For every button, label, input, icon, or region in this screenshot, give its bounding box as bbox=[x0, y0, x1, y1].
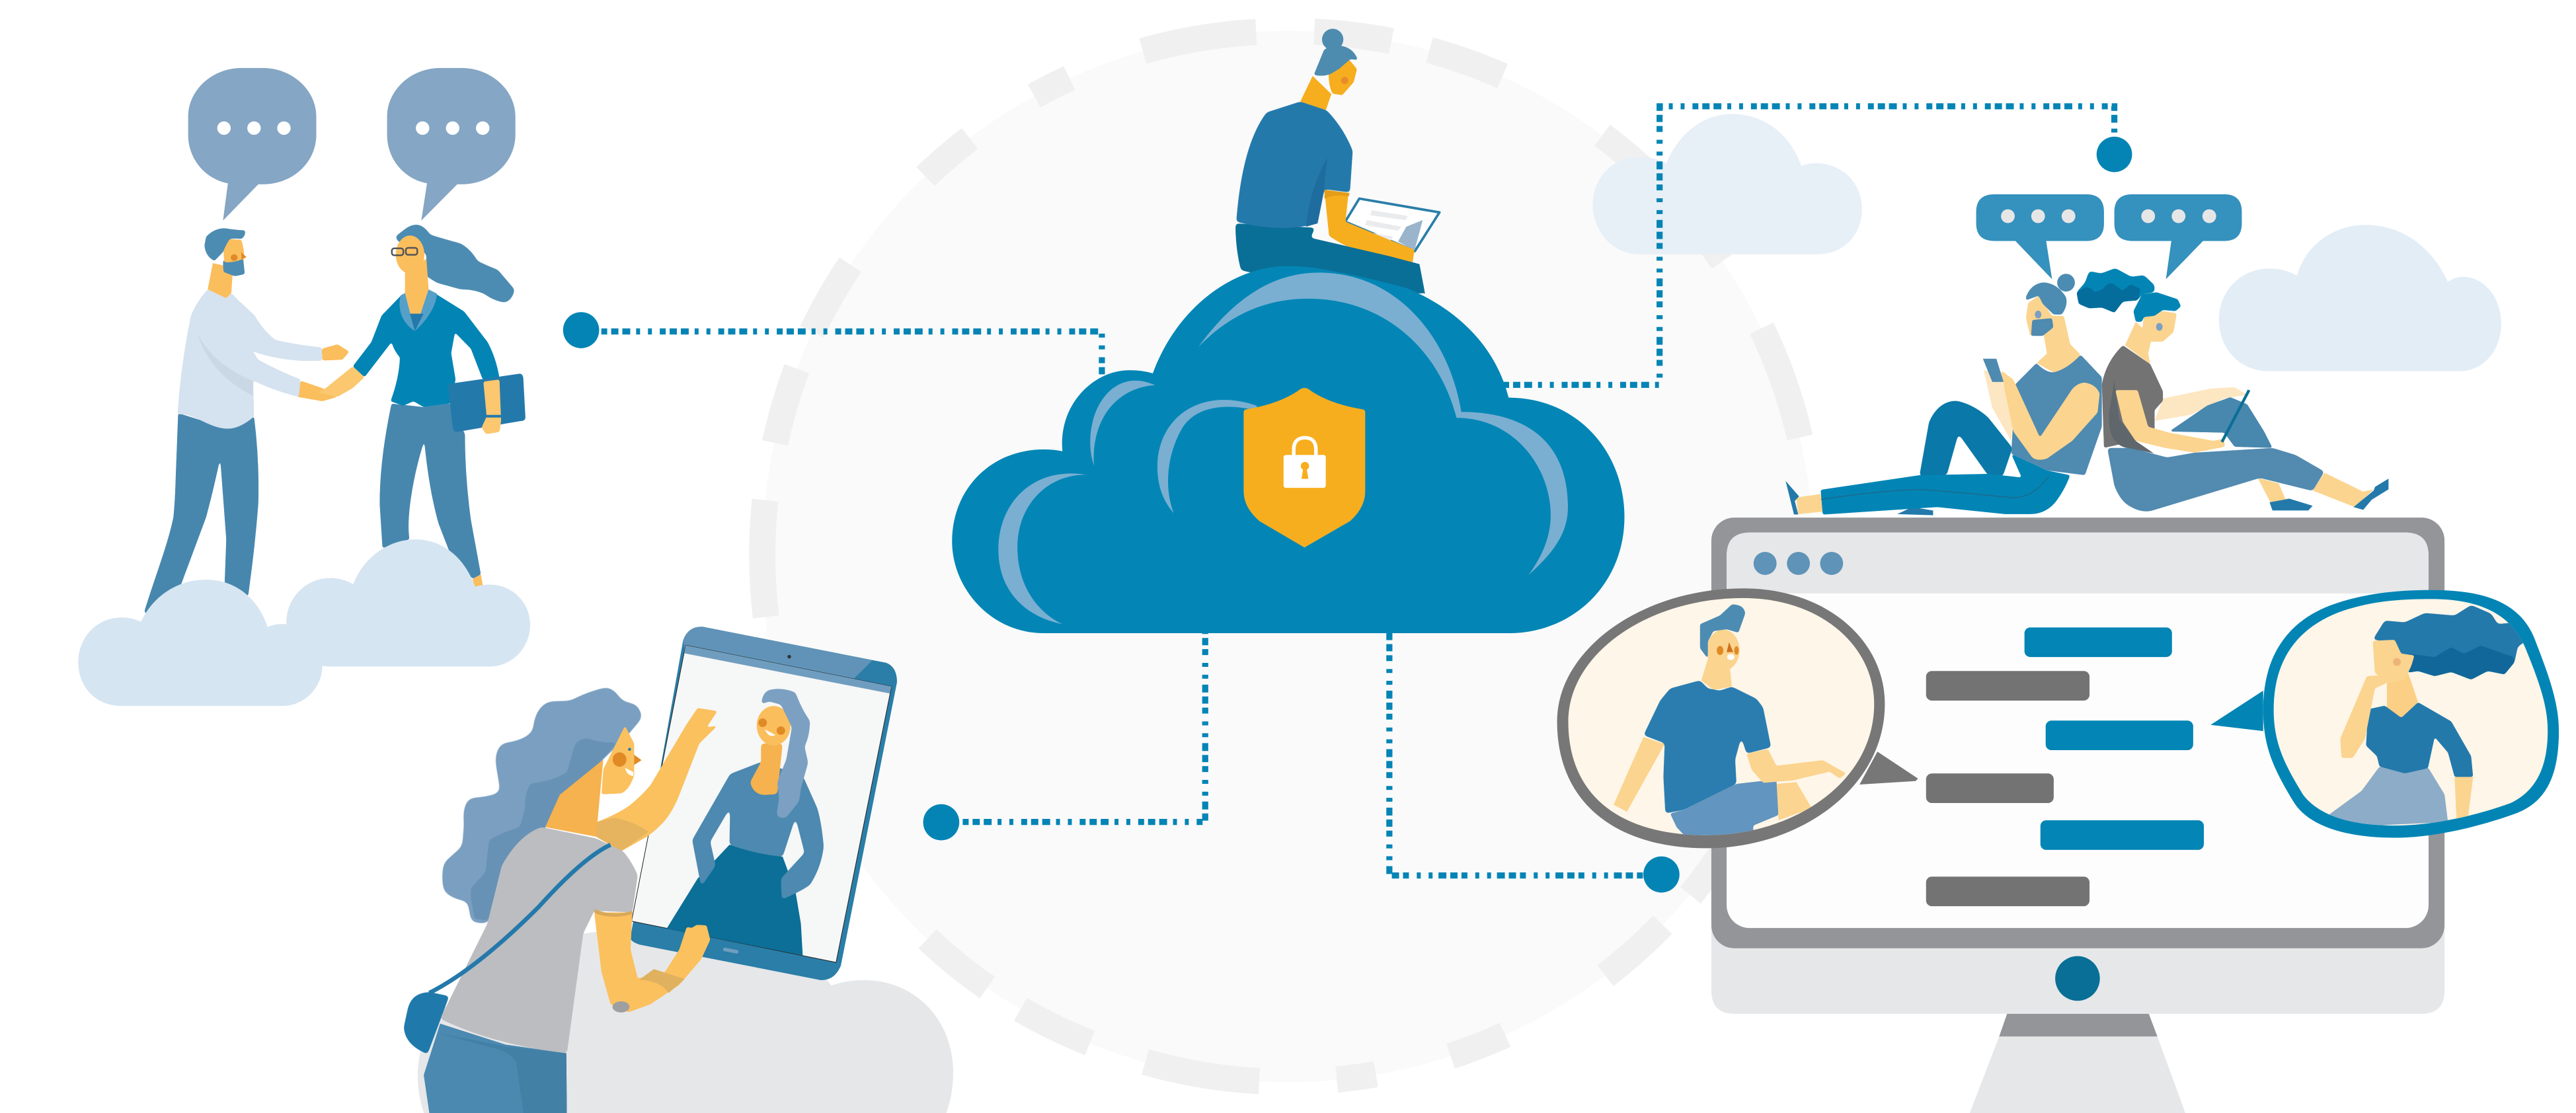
window dots bbox=[1754, 552, 1843, 575]
power button bbox=[2055, 956, 2100, 1001]
speech bubble: couple right bbox=[2115, 194, 2242, 279]
scene: handshake bbox=[78, 68, 530, 706]
monitor chin bbox=[1711, 854, 2444, 1014]
figure: woman raised arm bbox=[596, 708, 717, 851]
connector: bottom left bbox=[962, 627, 1205, 822]
figure: tablet edge bbox=[2222, 390, 2249, 442]
monitor frame bbox=[1711, 518, 2444, 948]
cloud highlights bbox=[998, 273, 1568, 624]
figure: woman pants bbox=[424, 1024, 566, 1113]
chat message bars bbox=[1926, 627, 2204, 906]
tablet screen bbox=[631, 645, 892, 962]
cloud: under man bbox=[78, 580, 323, 706]
figure: arm bbox=[1325, 192, 1415, 263]
figure: skirt bbox=[1235, 223, 1425, 293]
cloud: under woman bbox=[286, 539, 530, 667]
figure: pale back arm bbox=[2154, 387, 2247, 421]
figure: hair bbox=[1314, 28, 1358, 76]
browser header bbox=[1727, 533, 2429, 594]
figure: torso bbox=[1236, 102, 1352, 228]
icon: padlock bbox=[1284, 438, 1326, 488]
cloud: grey bottom bbox=[418, 930, 953, 1113]
figure: woman bag bbox=[404, 992, 449, 1054]
figure: back hair bbox=[2076, 268, 2154, 313]
scene: tablet woman bbox=[404, 627, 897, 1113]
tablet device bbox=[631, 627, 897, 980]
scene: couple on monitor bbox=[1785, 194, 2388, 516]
figure: man with phone bbox=[1785, 274, 2102, 516]
figure: woman with tablet bbox=[2076, 268, 2388, 512]
figure: man shaking hands bbox=[143, 228, 349, 624]
icon: security shield bbox=[1243, 388, 1365, 547]
monitor bbox=[1711, 518, 2444, 1113]
cloud: central bbox=[952, 266, 1624, 633]
node dots bbox=[563, 137, 2132, 892]
monitor screen bbox=[1727, 533, 2429, 928]
speech bubble: woman bbox=[387, 68, 516, 221]
figure: woman hair bbox=[442, 687, 643, 924]
figure: woman t-shirt bbox=[440, 827, 638, 1054]
figure: skirt over cloud bbox=[1241, 238, 1425, 293]
figure: neck and head bbox=[1300, 76, 1331, 110]
dashed ring bbox=[762, 32, 1800, 1081]
monitor stand bbox=[1970, 1036, 2185, 1113]
speech bubble: couple left bbox=[1976, 194, 2104, 279]
figure: woman with folder bbox=[317, 225, 526, 588]
figure: lower legs bbox=[2258, 478, 2290, 502]
speech bubble: man bbox=[188, 68, 316, 221]
figure: man in bubble bbox=[1614, 604, 1846, 837]
scene: person on central cloud bbox=[952, 28, 1624, 633]
connector: bottom right bbox=[1389, 627, 1643, 876]
connector: top right bbox=[1503, 106, 2115, 385]
reflection: woman on screen bbox=[667, 689, 824, 955]
background circle bbox=[762, 31, 1813, 1082]
figure: arm bbox=[2115, 390, 2225, 453]
cloud: upper right pale bbox=[1593, 114, 1862, 254]
figure: woman in bubble bbox=[2328, 605, 2528, 826]
figure: woman front arm bbox=[594, 909, 710, 1013]
connector lines bbox=[602, 106, 2115, 876]
figure: pants bbox=[2169, 397, 2273, 448]
figure: woman neck and face bbox=[545, 759, 604, 837]
bubble: woman portrait bbox=[2210, 590, 2559, 837]
connector: top left bbox=[602, 332, 1102, 381]
figure: grey shirt bbox=[2102, 345, 2163, 448]
figure: tablet bbox=[1345, 198, 1440, 251]
cloud: far right bbox=[2219, 225, 2501, 371]
bubble: man portrait bbox=[1557, 588, 1918, 848]
figure: woman strap bbox=[429, 845, 611, 993]
